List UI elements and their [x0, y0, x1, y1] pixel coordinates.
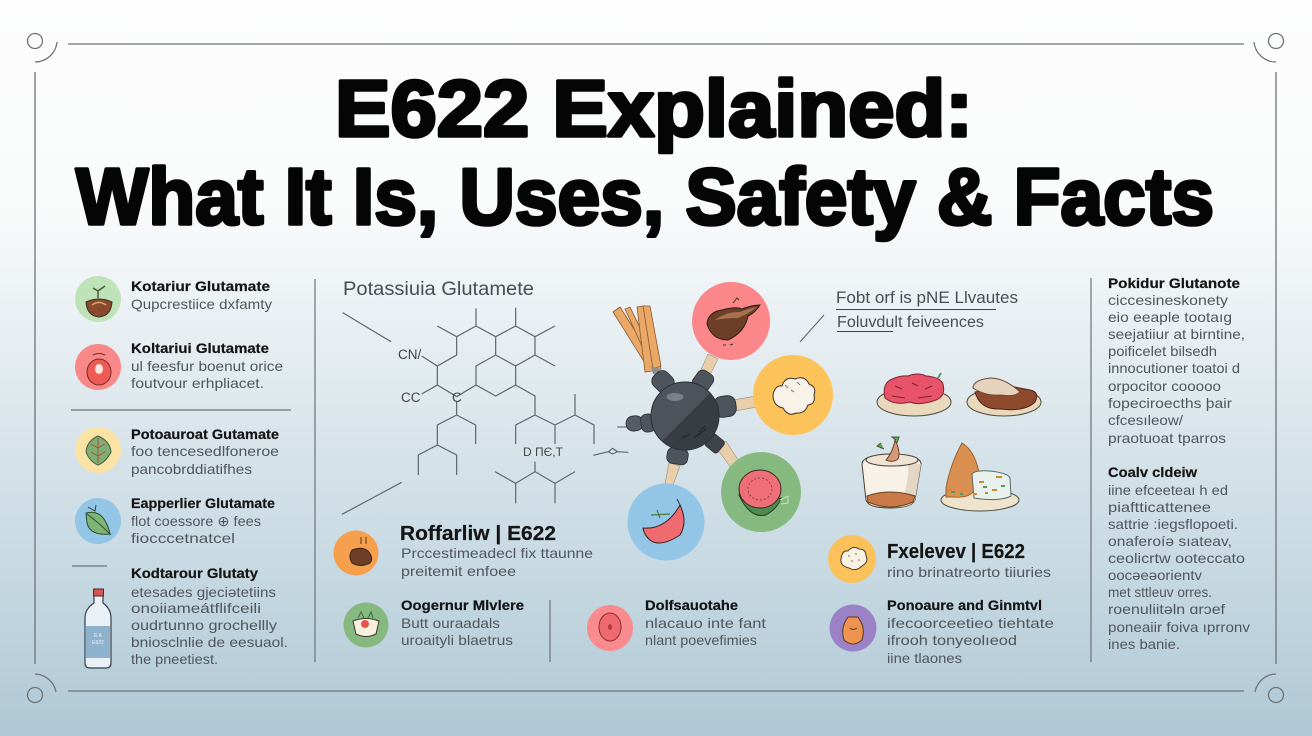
text block: Coalv cldeiw: Coalv cldeiw — [1108, 464, 1197, 480]
icon group: foods — [862, 373, 1041, 511]
icon: red meat on plate — [877, 373, 951, 416]
item: Eapperlier Glutamate: fiocccetnatcel — [131, 530, 235, 546]
text block: Coalv cldeiw: roenuliitəln ɑrɔef — [1108, 601, 1225, 617]
text block: Coalv cldeiw: piaftticattenee — [1108, 499, 1211, 515]
item: Eapperlier Glutamate: flot coessore ⊕ fees — [131, 513, 261, 529]
illustration: central hub with spokes — [613, 282, 833, 560]
item: Ponoaure and Ginmtvl: ifecoorceetieo tiehtate — [887, 615, 1054, 631]
text block: Coalv cldeiw: poneaiir foiva ıprronv — [1108, 619, 1250, 635]
icon: guava circle — [721, 452, 801, 532]
heading: Potassiuia Glutamete: Potassiuia Glutamete — [343, 278, 534, 300]
item: Kodtarour Glutaty — [131, 565, 288, 667]
item: Koltariui Glutamate: ul feesfur boenut orice — [131, 358, 283, 374]
icon: bottle — [85, 589, 111, 668]
callout: food sources: Fobt orf is pNE Llvautes — [836, 289, 1018, 307]
icon: popcorn circle — [753, 355, 833, 435]
item: Roffarliw E622: Roffarliw | E622 — [400, 523, 556, 545]
title: What It Is, Uses, Safety & Facts — [76, 152, 1214, 241]
text block: Pokidur Glutanote: seejatiiur at birntine, — [1108, 326, 1245, 342]
item: Kodtarour Glutaty: onoiiameátflifceili — [131, 600, 261, 616]
item: Kodtarour Glutaty: etesades gjeciətetiins — [131, 584, 276, 600]
item: Ponoaure and Ginmtvl: ifrooh tonyeolıeod — [887, 632, 1017, 648]
item: Roffarliw E622: preitemit enfoee — [401, 563, 516, 579]
item: Kodtarour Glutaty: the pneetiest. — [131, 651, 218, 667]
item: Potoauroat Gutamate: foo tencesedlfoneroe — [131, 443, 279, 459]
item: Oogernur Mlvlere: uroaityli blaetrus — [401, 632, 513, 648]
callout: food sources — [800, 289, 1018, 342]
text block: Pokidur Glutanote: praotuoat tparros — [1108, 430, 1226, 446]
icon: meat circle — [692, 282, 770, 360]
item: Dolfsauotahe: nlacauo inte fant — [645, 615, 766, 631]
item: Kotariur Glutamate: Kotariur Glutamate — [131, 278, 270, 294]
callout: food sources: Foluvdult feiveences — [837, 314, 984, 331]
panel: left column — [71, 276, 291, 668]
item: Dolfsauotahe: Dolfsauotahe — [645, 597, 738, 613]
text block: Coalv cldeiw: oocəeəorientv — [1108, 567, 1202, 583]
chart: molecular structure: D ΠЄ,T — [523, 445, 564, 459]
text block: Pokidur Glutanote — [1108, 275, 1245, 446]
item: Ponoaure and Ginmtvl: iine tlaones — [887, 650, 962, 666]
chart: molecular structure: CC — [401, 390, 421, 405]
item: Koltariui Glutamate: Koltariui Glutamate — [131, 340, 269, 356]
icon: sticks — [613, 306, 661, 372]
item: Potoauroat Gutamate: Potoauroat Gutamate — [131, 426, 279, 442]
icon: wedge and cheese — [941, 443, 1019, 511]
text block: Coalv cldeiw: iine efceeteaı h ed — [1108, 482, 1228, 498]
item: Koltariui Glutamate: foutvour erhpliacet. — [131, 375, 264, 391]
text block: Coalv cldeiw: ceolicrtw ooteccato — [1108, 550, 1245, 566]
chart: molecular structure: CN/ — [398, 347, 421, 362]
icon: cup with sprout — [862, 437, 921, 508]
item: Roffarliw E622 — [334, 523, 593, 579]
title — [76, 64, 1214, 241]
item: Kotariur Glutamate: Qupcrestiice dxfamty — [131, 296, 272, 312]
item: Dolfsauotahe: nlant poevefimies — [645, 632, 757, 648]
item: Kodtarour Glutaty: bniosclnlie de eesuaol. — [131, 634, 288, 650]
item: Potoauroat Gutamate: pancobrddiatifhes — [131, 461, 252, 477]
item: Eapperlier Glutamate — [75, 495, 275, 546]
icon: tomato slice circle — [628, 484, 704, 560]
text block: Coalv cldeiw: sattrie :iegsflopoeti. — [1108, 516, 1238, 532]
title: E622 Explained: — [335, 64, 973, 153]
item: Potoauroat Gutamate — [75, 426, 279, 477]
item: Kodtarour Glutaty: oudrtunno grochellly — [131, 617, 277, 633]
item: Oogernur Mlvlere: Oogernur Mlvlere — [401, 597, 524, 613]
icon: bread and meat on plate — [967, 378, 1041, 416]
icon: bottle: E622 — [92, 640, 104, 646]
item: Fxelevev E622: Fxelevev | E622 — [887, 541, 1025, 563]
icon: bottle: E A — [94, 633, 103, 639]
text block: Pokidur Glutanote: cfcesıleow/ — [1108, 412, 1183, 428]
chart: molecular structure: C — [452, 390, 462, 405]
text block: Coalv cldeiw: met sttleuv orres. — [1108, 584, 1212, 600]
item: Fxelevev E622 — [828, 535, 1051, 583]
text block: Pokidur Glutanote: Pokidur Glutanote — [1108, 275, 1240, 291]
text block: Pokidur Glutanote: fopeciroecths þair — [1108, 395, 1232, 411]
text block: Pokidur Glutanote: poificelet bilsedh — [1108, 343, 1217, 359]
item: Roffarliw E622: Prccestimeadecl fix ttaunne — [401, 545, 593, 561]
item: Kodtarour Glutaty: Kodtarour Glutaty — [131, 565, 258, 581]
panel: right text column — [1108, 275, 1250, 652]
item: Ponoaure and Ginmtvl — [830, 597, 1054, 666]
item: Kotariur Glutamate — [75, 276, 272, 322]
text block: Pokidur Glutanote: innocutioner toatoi d — [1108, 360, 1240, 376]
text block: Coalv cldeiw — [1108, 464, 1250, 652]
text block: Pokidur Glutanote: orpocitor cooooo — [1108, 378, 1221, 394]
text block: Pokidur Glutanote: ciccesineskonety — [1108, 292, 1228, 308]
chart: molecular structure — [342, 308, 628, 514]
text block: Coalv cldeiw: ines banie. — [1108, 636, 1180, 652]
item: Oogernur Mlvlere — [344, 597, 524, 648]
item: Dolfsauotahe — [587, 597, 766, 651]
item: Ponoaure and Ginmtvl: Ponoaure and Ginmtvl — [887, 597, 1042, 613]
item: Fxelevev E622: rino brinatreorto tiiuries — [887, 564, 1051, 580]
text block: Coalv cldeiw: onaferoíə sıateav, — [1108, 533, 1232, 549]
item: Oogernur Mlvlere: Butt ouraadals — [401, 615, 500, 631]
item: Koltariui Glutamate — [75, 340, 283, 391]
text block: Pokidur Glutanote: eio eeaple tootaıg — [1108, 309, 1232, 325]
item: Eapperlier Glutamate: Eapperlier Glutamate — [131, 495, 275, 511]
